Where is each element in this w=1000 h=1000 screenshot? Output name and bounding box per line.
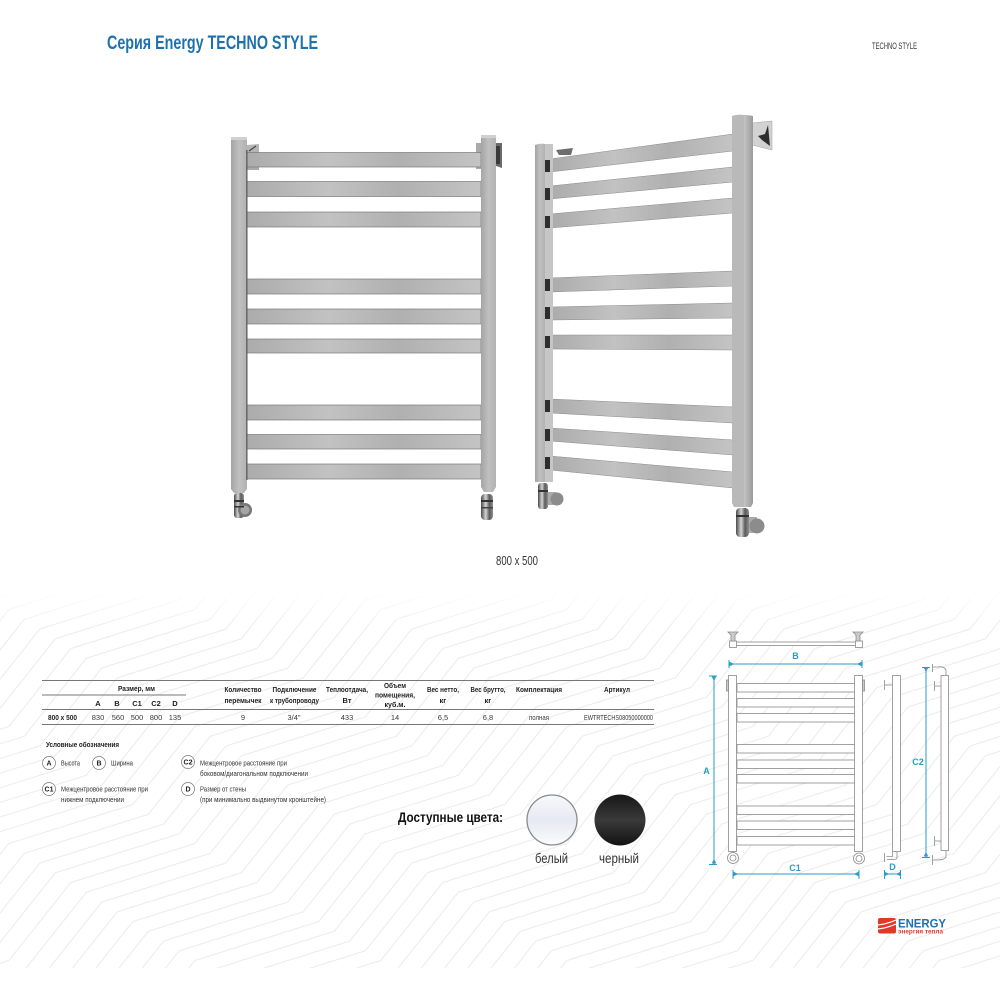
logo tagline: энергия тепла (898, 930, 944, 936)
table row: 6,5 (438, 713, 448, 722)
legend letters (45, 760, 193, 794)
right valve (736, 508, 764, 537)
dimension drawing (703, 632, 948, 879)
rail joints (545, 160, 550, 469)
front view rails (737, 684, 855, 845)
table header: Теплоотдача, (326, 685, 368, 694)
legend heading: Условные обозначения (46, 740, 119, 749)
wall brackets (247, 143, 502, 170)
left post (231, 137, 248, 493)
table header: C2 (151, 699, 161, 708)
table row: EWTRTECHS08050000000 (584, 713, 653, 722)
legend (42, 740, 326, 804)
size caption: 800 x 500 (496, 553, 538, 568)
table row: 9 (241, 713, 245, 722)
table row: полная (529, 713, 549, 722)
side view with pipes (932, 664, 948, 865)
swatch: black (594, 794, 646, 846)
specification table (42, 680, 654, 724)
legend descriptions: нижнем подключении (61, 795, 124, 804)
table row: 14 (391, 713, 399, 722)
table header: кг (440, 696, 446, 705)
top view (728, 632, 863, 648)
table row: 500 (131, 713, 143, 722)
table row: 433 (341, 713, 353, 722)
legend descriptions: боковом/диагональном подключении (200, 769, 308, 778)
legend descriptions: Ширина (111, 758, 134, 768)
table row: 800 x 500 (48, 713, 77, 722)
series label: TECHNO STYLE (872, 41, 917, 51)
table header (95, 681, 630, 709)
table header: C1 (132, 699, 142, 708)
table row: 6,8 (483, 713, 493, 722)
swatch: white (527, 795, 577, 845)
legend letters: D (185, 786, 191, 794)
table header: Количество (224, 685, 262, 694)
logo wordmark: ENERGY (898, 916, 946, 930)
left valve (538, 483, 564, 509)
dimension labels: B (792, 651, 799, 661)
wall brackets (556, 121, 772, 155)
dimension arrows (709, 660, 930, 879)
brand logo (878, 916, 946, 936)
right valve (481, 494, 493, 520)
legend descriptions: Межцентровое расстояние при (200, 758, 287, 768)
legend descriptions: Высота (61, 758, 81, 768)
colours heading: Доступные цвета: (398, 809, 503, 825)
table header: D (172, 699, 178, 708)
dimension labels: C2 (912, 757, 924, 767)
rails (550, 134, 733, 488)
legend letters: C2 (184, 760, 193, 766)
dimension labels: D (889, 862, 896, 872)
right post (481, 135, 496, 492)
background zigzag pattern (0, 590, 1000, 968)
legend letters: A (46, 760, 52, 768)
table header: Размер, мм (118, 684, 155, 693)
table row (48, 713, 653, 722)
table row: 560 (112, 713, 124, 722)
radiator photo: angled view (535, 115, 772, 537)
table header: A (95, 699, 101, 708)
table header: Артикул (604, 685, 630, 694)
table row: 3/4" (287, 713, 301, 722)
label: black: черный (599, 850, 639, 866)
label: white: белый (535, 850, 568, 866)
legend letters: B (96, 760, 102, 768)
title: Серия Energy TECHNO STYLE (107, 33, 318, 54)
table row: 135 (169, 713, 181, 722)
side view (884, 676, 900, 862)
radiator photo: front view (231, 135, 502, 520)
legend descriptions (61, 758, 326, 804)
table header: куб.м. (384, 700, 406, 709)
table header: Вт (342, 696, 352, 705)
table header: перемычек (224, 696, 262, 705)
table header: Подключение (272, 685, 316, 694)
right post (732, 115, 753, 507)
legend descriptions: Размер от стены (200, 784, 246, 794)
table row: 830 (92, 713, 104, 722)
table header: Объем (384, 681, 406, 690)
front view posts (726, 676, 864, 864)
logo mark (878, 918, 896, 934)
table header: Комплектация (516, 685, 562, 694)
left post (535, 144, 553, 482)
dimension labels: C1 (789, 863, 801, 873)
table row: 800 (150, 713, 162, 722)
legend descriptions: (при минимально выдвинутом кронштейне) (200, 795, 326, 804)
legend descriptions: Межцентровое расстояние при (61, 784, 148, 794)
dimension labels (703, 651, 924, 873)
available colours (398, 794, 646, 866)
left valve (234, 493, 252, 518)
legend circles (42, 756, 194, 796)
table header: Вес брутто, (470, 685, 506, 694)
legend letters: C1 (45, 786, 54, 794)
table header: B (114, 699, 120, 708)
dimension labels: A (703, 766, 710, 776)
table header: кг (485, 696, 491, 705)
rails (246, 152, 481, 479)
table header: Вес нетто, (427, 685, 459, 694)
table header: помещения, (375, 690, 415, 700)
table header: к трубопроводу (270, 696, 320, 705)
